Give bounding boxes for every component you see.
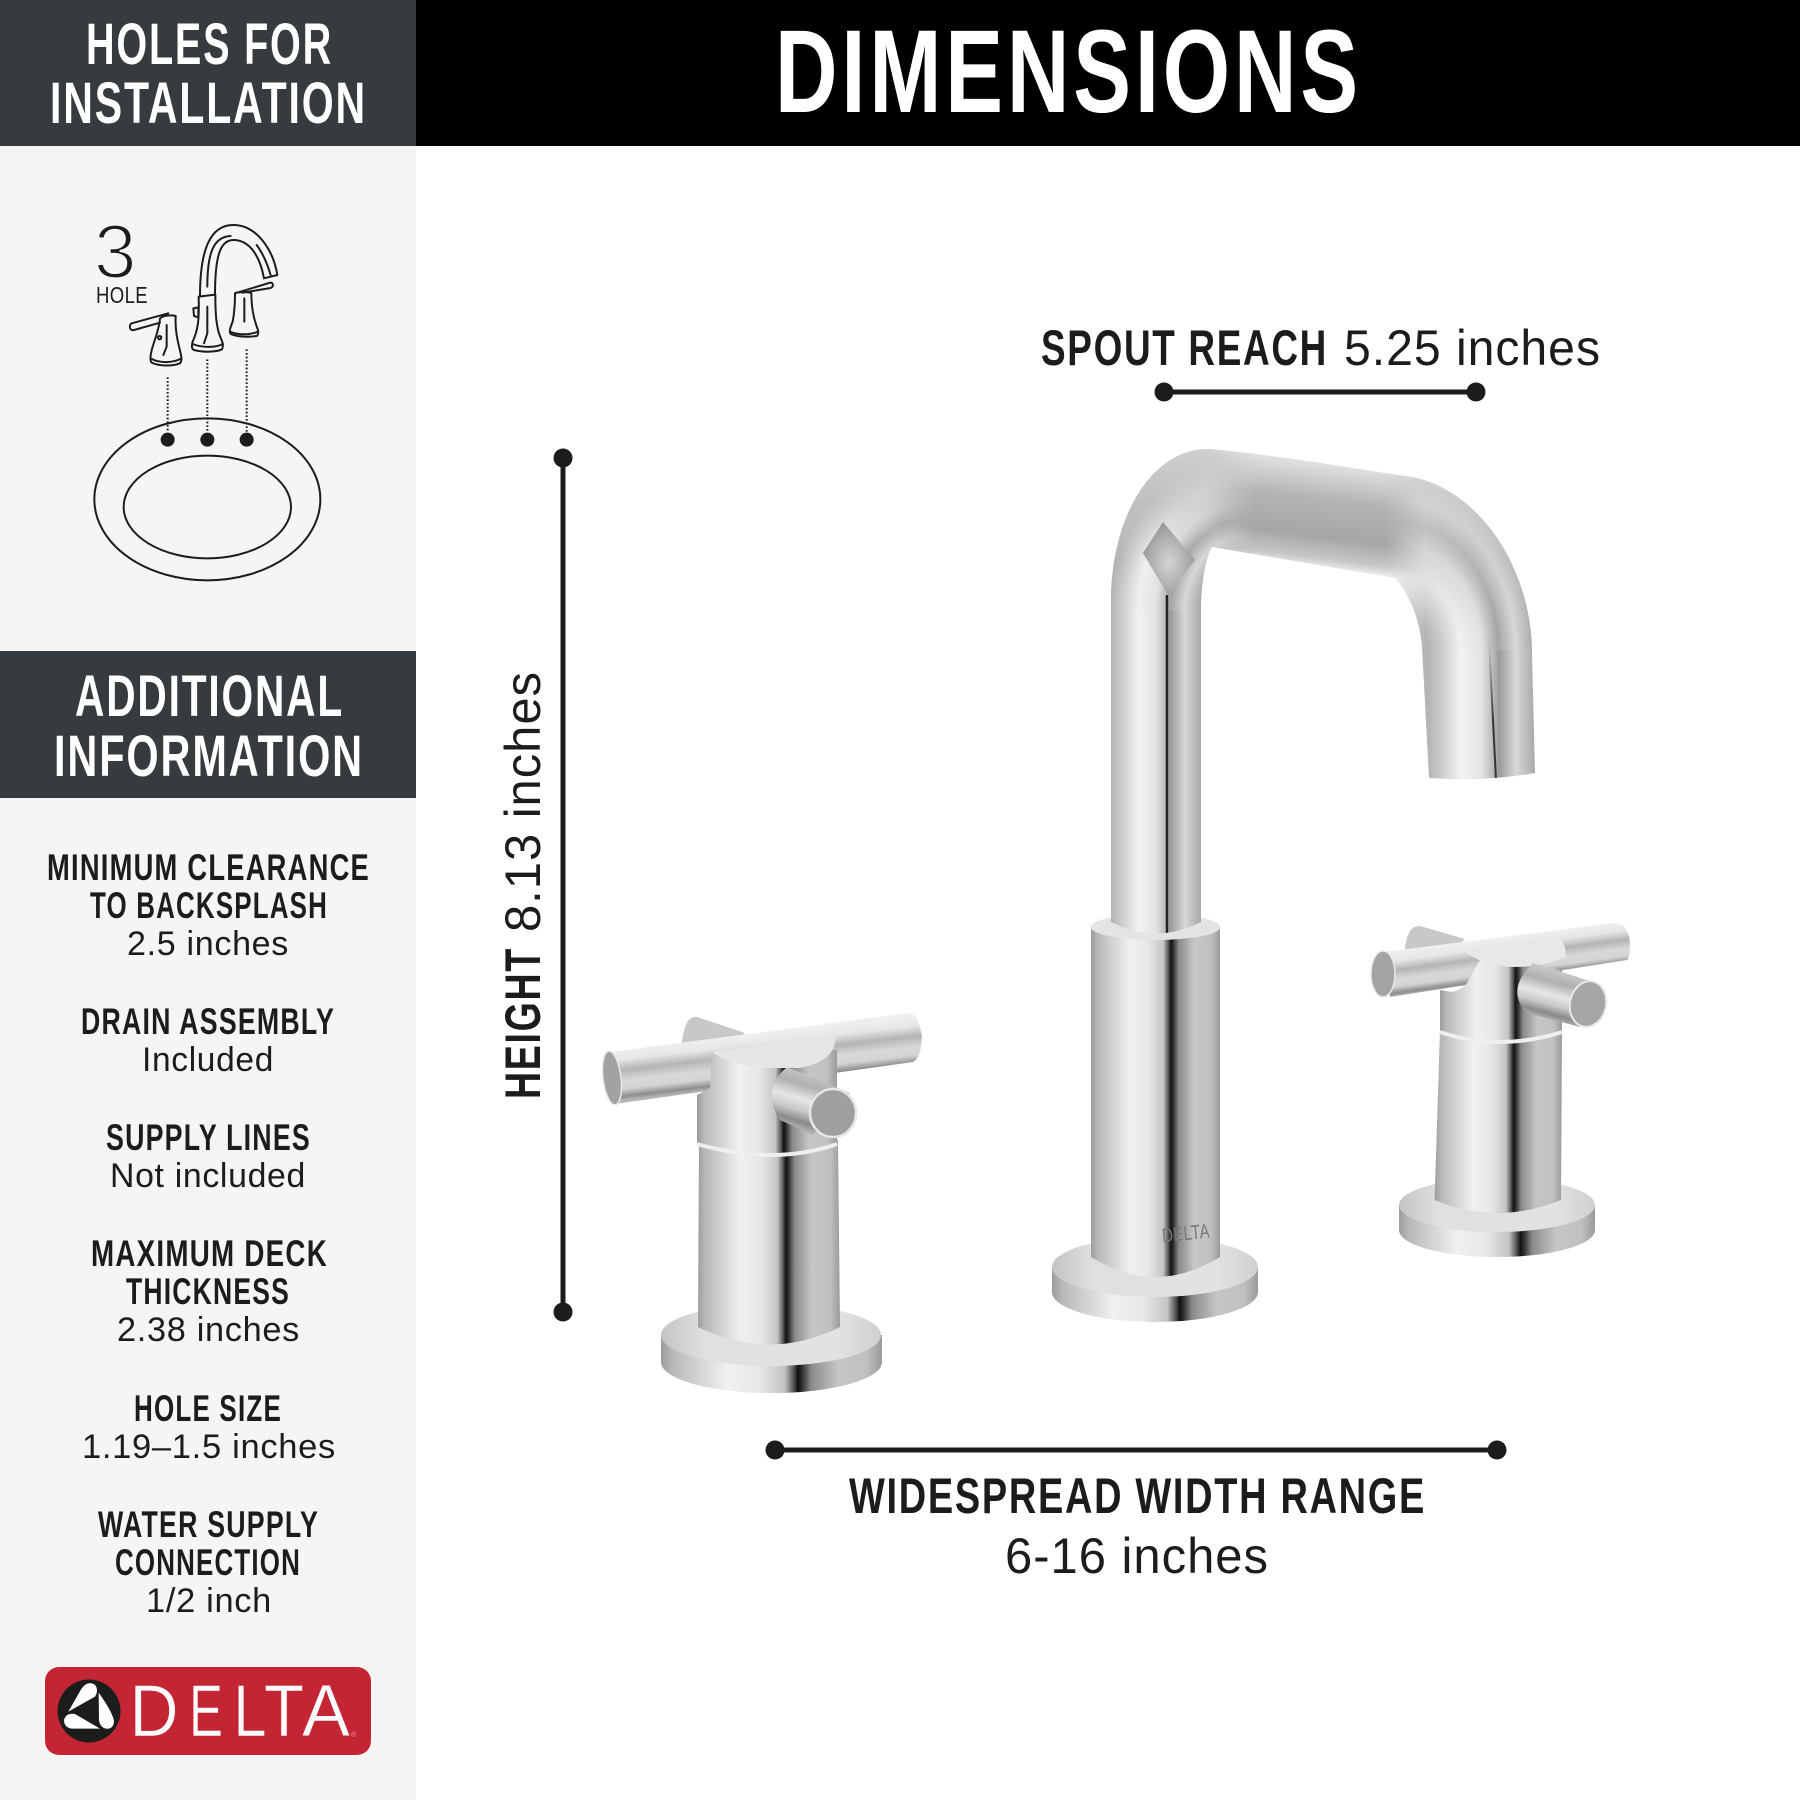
title bar: dimensions: DIMENSIONS (775, 6, 1362, 138)
spec: drain assembly (81, 1001, 335, 1079)
spec: water supply connection: 1/2 inch (146, 1582, 272, 1620)
logo: delta: T (264, 1671, 304, 1752)
left handle (600, 1013, 922, 1393)
center spout assembly (1052, 440, 1545, 1322)
spec: drain assembly: Included (142, 1041, 274, 1079)
dimension: widespread width range (766, 1440, 1506, 1584)
spec: minimum clearance (47, 847, 370, 963)
dimension: spout reach (1041, 320, 1601, 402)
spec: drain assembly: DRAIN ASSEMBLY (81, 1001, 335, 1042)
heading: additional information (0, 651, 416, 798)
heading: additional information: ADDITIONAL (75, 664, 344, 729)
spec: hole size: HOLE SIZE (134, 1388, 282, 1429)
panel: left sidebar (0, 0, 416, 1800)
spec: maximum deck thickness: THICKNESS (126, 1271, 290, 1312)
spec: maximum deck thickness: MAXIMUM DECK (91, 1233, 328, 1274)
icon: three hole faucet and basin diagram: HOLE (96, 282, 148, 308)
dimension: widespread width range: 6-16 inches (1005, 1528, 1269, 1584)
spec: hole size: 1.19–1.5 inches (82, 1428, 336, 1466)
spec: supply lines: SUPPLY LINES (106, 1117, 311, 1158)
dimension: height: 8.13 inches (495, 671, 551, 932)
spec: water supply connection: WATER SUPPLY (98, 1504, 319, 1545)
heading: additional information: INFORMATION (54, 724, 364, 789)
dimension: widespread width range: WIDESPREAD WIDTH RANGE (849, 1468, 1426, 1524)
logo: delta: ® (351, 1731, 357, 1739)
dimension: height (495, 448, 572, 1322)
spec: minimum clearance: MINIMUM CLEARANCE (47, 847, 370, 888)
icon: three hole faucet and basin diagram (94, 210, 320, 580)
center spout assembly: DELTA (1161, 1221, 1211, 1247)
right handle (1371, 923, 1630, 1257)
logo: delta: L (234, 1671, 266, 1752)
logo: delta: D (130, 1671, 178, 1752)
title bar: dimensions (416, 0, 1800, 146)
logo: delta (45, 1667, 371, 1755)
spec: hole size (82, 1388, 336, 1466)
logo: delta: E (189, 1671, 223, 1752)
spec: maximum deck thickness: 2.38 inches (117, 1311, 300, 1349)
spec: supply lines: Not included (110, 1157, 306, 1195)
heading: holes for installation: HOLES FOR (86, 12, 333, 77)
dimension: spout reach: SPOUT REACH (1041, 320, 1328, 376)
spec: supply lines (106, 1117, 311, 1195)
spec: minimum clearance: TO BACKSPLASH (90, 885, 328, 926)
logo: delta: A (302, 1671, 350, 1752)
heading: holes for installation (0, 0, 416, 146)
faucet illustration (600, 440, 1630, 1393)
spec: maximum deck thickness (91, 1233, 328, 1349)
spec: minimum clearance: 2.5 inches (127, 925, 289, 963)
heading: holes for installation: INSTALLATION (50, 71, 367, 136)
dimension: spout reach: 5.25 inches (1344, 320, 1601, 376)
spec: water supply connection (98, 1504, 319, 1620)
icon: three hole faucet and basin diagram: 3 (94, 210, 138, 295)
spec: water supply connection: CONNECTION (115, 1542, 301, 1583)
dimension: height: HEIGHT (495, 947, 551, 1099)
